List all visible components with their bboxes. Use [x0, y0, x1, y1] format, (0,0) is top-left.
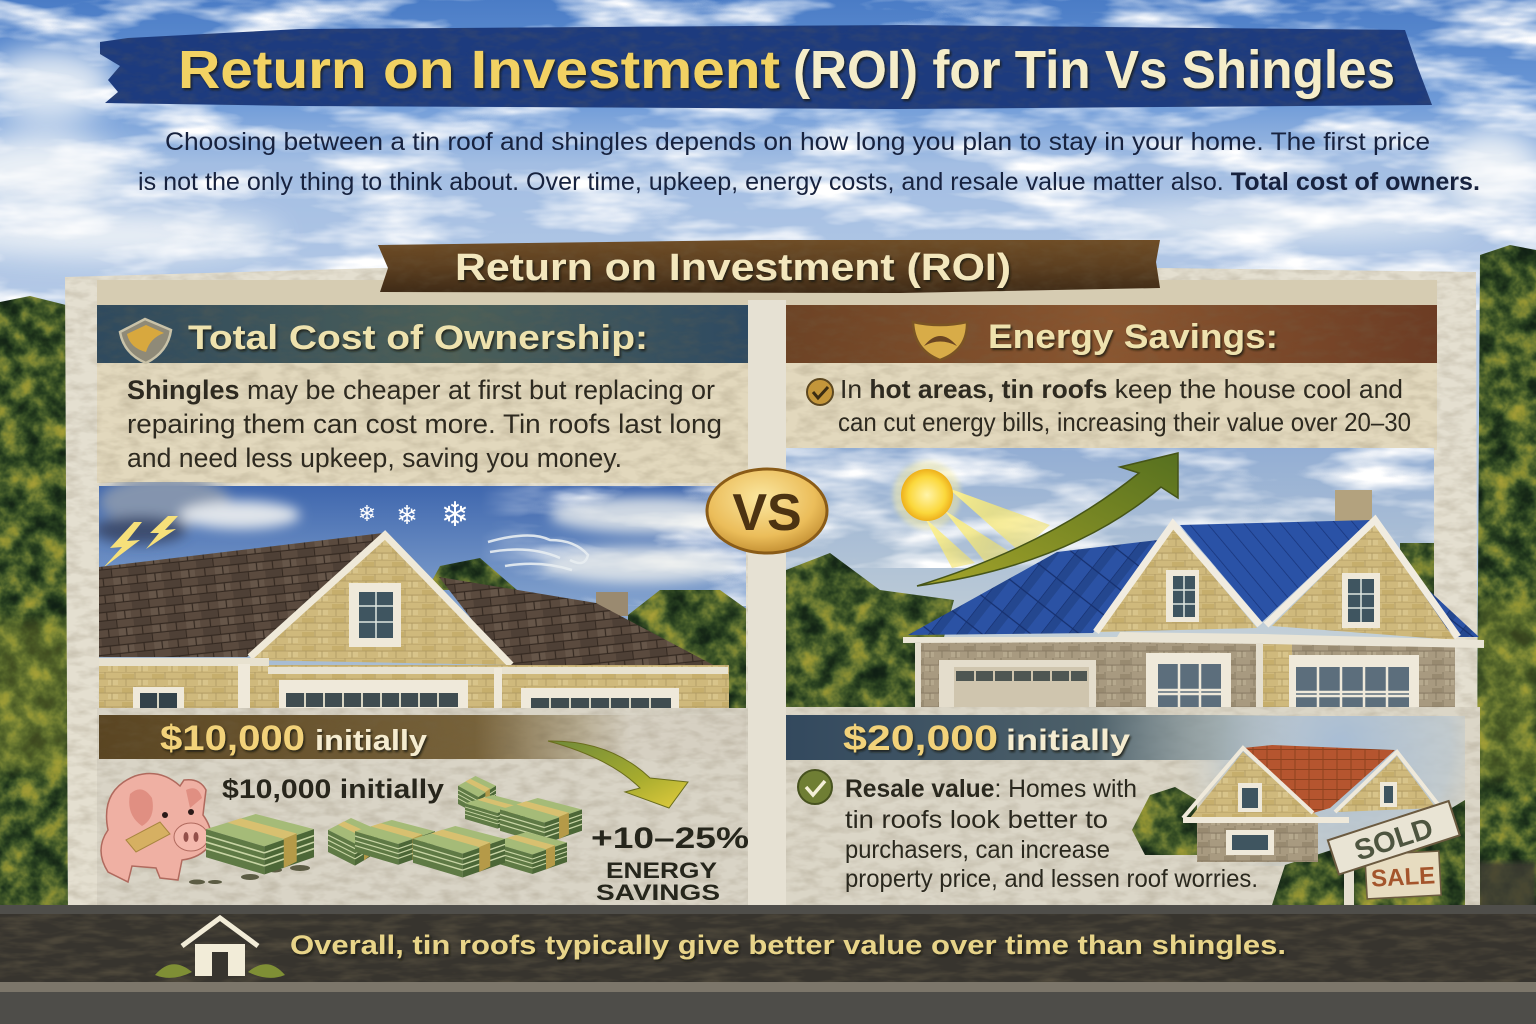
header: total cost	[97, 305, 748, 363]
icon: coins	[189, 865, 310, 884]
gable wall	[250, 538, 511, 665]
icon: money stacks	[206, 776, 582, 878]
price strip: shingles	[99, 715, 746, 759]
callout: energy savings: ENERGY	[606, 858, 717, 883]
footer banner	[0, 914, 1536, 982]
body text: total cost	[127, 375, 722, 473]
icon: check bullet	[807, 379, 833, 405]
icon: piggy bank	[101, 774, 211, 882]
dormer window	[349, 583, 401, 647]
header: total cost: Total Cost of Ownership:	[188, 319, 648, 357]
price strip: shingles: initially	[315, 725, 427, 757]
front roof	[99, 533, 383, 657]
price strip: tin	[786, 715, 1300, 760]
body text: energy savings: can cut energy bills, increasing their value over 20–30	[838, 407, 1411, 437]
trees behind house	[786, 543, 1440, 708]
icon: house with leaves	[155, 918, 285, 978]
icon: snowflakes: ❄	[358, 501, 376, 526]
footer message: Overall, tin roofs typically give better value over time than shingles.	[290, 930, 1286, 960]
panel: shingle cost	[97, 708, 749, 906]
callout: energy savings: SAVINGS	[596, 880, 720, 905]
illustration: shingle house in storm	[94, 476, 750, 710]
main panel	[65, 268, 1478, 912]
illustration: sold house	[1132, 745, 1465, 905]
panel: total cost of ownership	[97, 305, 748, 483]
chimney	[1335, 490, 1372, 524]
sold sign: SALE	[1370, 862, 1436, 893]
sold sign: SOLD	[1351, 812, 1437, 868]
gables	[1096, 520, 1458, 640]
callout: energy savings	[591, 822, 749, 905]
price strip: shingles: $10,000	[160, 719, 305, 758]
title text: Return on Investment	[178, 40, 780, 100]
panel: energy savings	[786, 305, 1437, 450]
price strip: tin: $20,000	[843, 719, 998, 758]
section heading: Return on Investment (ROI)	[455, 247, 1011, 289]
icon: snowflakes: ❄	[441, 496, 469, 534]
icon: gold shield	[913, 322, 967, 360]
blue metal roof	[908, 520, 1479, 637]
intro text: is not the only thing to think about. Over time, upkeep, energy costs, and resale value matter also. Total cost of owners.	[138, 168, 1480, 196]
sun	[893, 461, 961, 529]
body text: total cost: repairing them can cost more. Tin roofs last long	[127, 409, 722, 439]
trees behind house	[427, 558, 517, 590]
body text: total cost: Shingles may be cheaper at first but replacing or	[127, 375, 715, 405]
body text: resale value: tin roofs look better to	[845, 806, 1108, 834]
section banner	[378, 240, 1160, 293]
storm cloud	[94, 476, 300, 544]
icon: check bullet	[798, 770, 832, 804]
price label: $10,000 initially	[222, 774, 444, 804]
wall and garages	[99, 658, 729, 710]
trees right	[1476, 245, 1536, 916]
title banner	[100, 25, 1432, 109]
trees left	[0, 296, 70, 915]
body text: energy savings: In hot areas, tin roofs keep the house cool and	[840, 374, 1403, 404]
body text: total cost: and need less upkeep, saving you money.	[127, 443, 622, 473]
body text: energy savings	[838, 374, 1411, 437]
header: energy savings: Energy Savings:	[988, 318, 1278, 356]
chimney	[596, 592, 628, 616]
icon: lightning	[103, 516, 178, 568]
header: energy savings	[786, 305, 1437, 363]
sold sign	[1328, 801, 1460, 906]
back roof	[439, 577, 717, 667]
VS badge	[707, 469, 827, 553]
arrow: value increasing	[917, 453, 1178, 586]
road strip	[0, 905, 1536, 1024]
icon: snowflakes	[360, 501, 466, 526]
icon: shield	[120, 319, 171, 363]
intro text: Choosing between a tin roof and shingles depends on how long you plan to stay in your home. The first price	[165, 128, 1430, 156]
callout: energy savings: +10–25%	[591, 822, 749, 855]
sun rays	[925, 488, 1050, 568]
icon: snowflakes: ❄	[396, 500, 418, 530]
intro text	[138, 128, 1480, 196]
panel: tin cost and resale	[786, 707, 1480, 907]
illustration: tin roof house with sun	[786, 448, 1484, 708]
body text: resale value: purchasers, can increase	[845, 836, 1110, 864]
VS badge: VS	[732, 484, 802, 542]
walls and garage	[903, 632, 1484, 708]
body text: resale value: property price, and lessen roof worries.	[845, 865, 1258, 893]
arrow: energy savings	[548, 741, 688, 808]
body text: resale value: Resale value: Homes with	[845, 775, 1137, 803]
body text: resale value	[845, 775, 1258, 893]
title text: (ROI) for Tin Vs Shingles	[793, 40, 1395, 100]
price strip: tin: initially	[1006, 724, 1130, 757]
icon: wind swirls	[488, 535, 588, 570]
